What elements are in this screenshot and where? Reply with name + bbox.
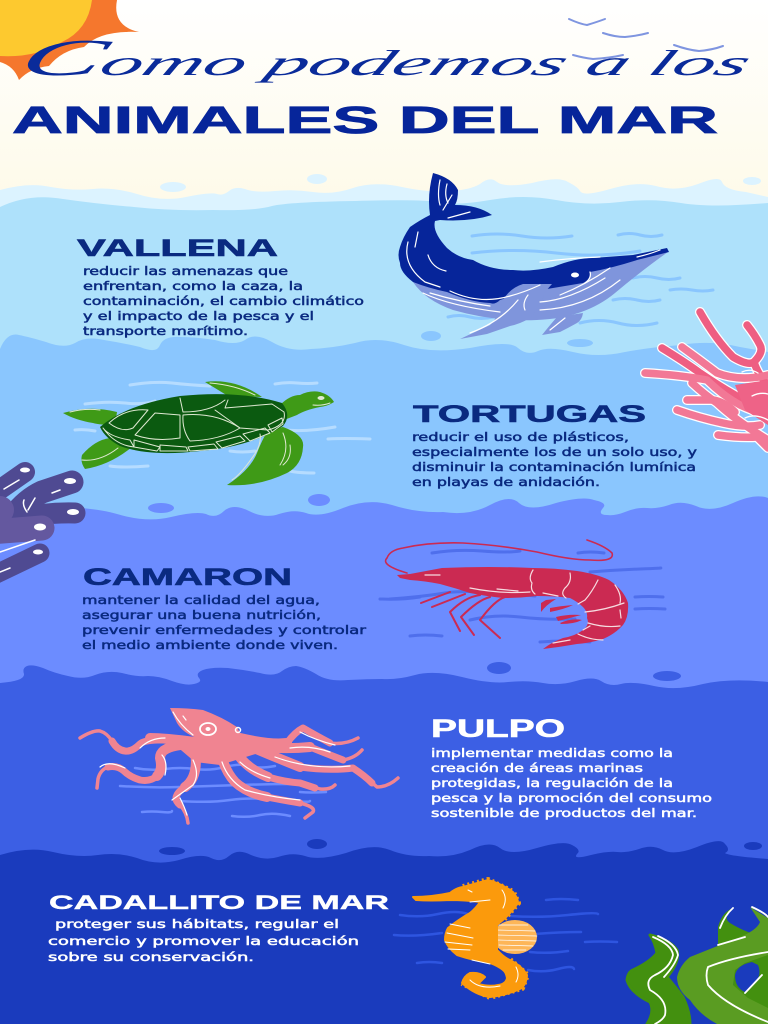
section: seahorse text [48,892,389,964]
wave layer: shrimp water [0,494,768,1024]
body: camaron: prevenir enfermedades y controlar [82,623,366,637]
shrimp illustration [380,540,665,649]
body: tortugas: especialmente los de un solo uso, y [412,445,697,459]
back dark blade [718,908,768,1024]
title script line: C omo podemos a los [11,28,765,86]
body: vallena: y el impacto de la pesca y el [83,309,314,323]
wave layer: octopus water [0,662,768,1024]
body: vallena [83,264,364,338]
heading: pulpo: PULPO [431,715,565,743]
icon: sun [0,0,139,80]
left blade [627,935,690,1024]
seahorse body [413,880,527,997]
wave layer: seahorse water [0,839,768,1024]
body: vallena: transporte marítimo. [83,324,248,338]
shrimp legs [421,592,505,638]
body: pulpo: pesca y la promoción del consumo [431,791,712,805]
seahorse fin [493,920,537,954]
wave layer: turtle water [0,331,768,1024]
sky background [0,0,768,210]
whale eye [571,272,579,278]
body: pulpo: sostenible de productos del mar. [431,806,697,820]
turtle eye [318,396,324,400]
body: cadallito de mar: comercio y promover la educación [48,934,359,948]
body: cadallito de mar [48,917,359,964]
body: camaron: mantener la calidad del agua, [82,593,320,607]
coral: pink right [645,312,768,448]
body: pulpo: protegidas, la regulación de la [431,776,673,790]
octopus illustration [80,708,398,823]
octopus head [170,708,262,765]
body: tortugas: disminuir la contaminación lumínica [412,460,696,474]
birds [569,19,723,59]
body: tortugas [412,430,697,489]
shrimp body [397,567,628,649]
body: vallena: contaminación, el cambio climático [83,294,364,308]
octopus arms [80,728,398,823]
title main line: ANIMALES DEL MAR [12,100,718,142]
seaweed illustration [627,907,768,1024]
coral: purple left [0,468,79,576]
body: pulpo [431,746,712,820]
octopus eye [200,723,240,735]
seahorse illustration [394,880,617,997]
shrimp antenna [386,540,612,573]
section: octopus text [431,715,712,820]
body: tortugas: en playas de anidación. [412,475,600,489]
turtle illustration [63,381,370,485]
body: tortugas: reducir el uso de plásticos, [412,430,629,444]
turtle flippers and head [63,409,117,425]
heading: vallena: VALLENA [77,235,278,262]
heading: tortugas: TORTUGAS [413,401,646,428]
section: turtle text [412,401,697,489]
whale illustration [398,173,713,339]
body: vallena: reducir las amenazas que [83,264,288,278]
front blade [677,907,768,1024]
body: cadallito de mar: sobre su conservación. [48,950,254,964]
turtle shell [100,394,287,453]
body: cadallito de mar: proteger sus hábitats, regular el [55,917,339,931]
body: camaron: asegurar una buena nutrición, [82,608,321,622]
heading: cadallito de mar: CADALLITO DE MAR [49,892,389,914]
heading: camaron: CAMARON [83,564,292,591]
body: camaron [82,593,366,652]
body: vallena: enfrentan, como la caza, la [83,279,303,293]
section: whale text [77,235,364,338]
body: pulpo: implementar medidas como la [431,746,673,760]
body: pulpo: creación de áreas marinas [431,761,643,775]
section: shrimp text [82,564,366,652]
body: camaron: el medio ambiente donde viven. [82,638,338,652]
